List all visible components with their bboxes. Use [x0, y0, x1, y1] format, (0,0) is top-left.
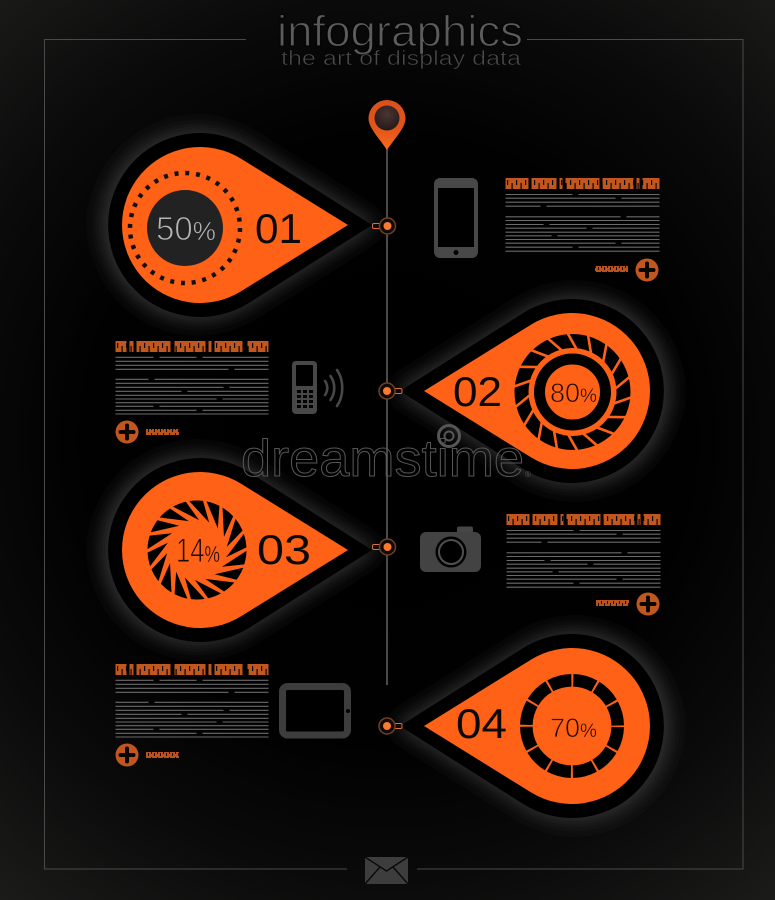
orange teardrop: [424, 313, 650, 469]
node 03: [372, 539, 396, 555]
greeked body lines: [506, 194, 660, 251]
icon: tablet: [282, 686, 350, 735]
more button 2: [116, 420, 179, 444]
icon: camera: [420, 526, 481, 572]
greeked body lines: [116, 680, 268, 737]
orange teardrop: [122, 472, 348, 628]
greeked body lines: [116, 357, 268, 414]
heading: infographics: infographics: [277, 7, 523, 56]
watermark: ®: [525, 470, 531, 479]
watermark: dreamstime: [241, 430, 524, 488]
drop 02: [394, 295, 670, 487]
subtitle: the art of display data: [281, 48, 522, 70]
more button 3: [596, 592, 660, 616]
swirl ring: [146, 499, 248, 601]
number: 02: [453, 368, 502, 415]
glow: [102, 129, 378, 321]
percent disc: [147, 190, 223, 266]
node 01: [372, 218, 396, 234]
more button 4: [116, 744, 179, 766]
drop 01: [102, 129, 378, 321]
number: 01: [255, 205, 302, 252]
orange teardrop: [424, 648, 650, 804]
orange teardrop: [122, 147, 348, 303]
dotted ring: [130, 173, 240, 283]
percent value: 14%: [176, 532, 220, 570]
greeked heading: [116, 341, 268, 352]
title: [277, 7, 523, 70]
text block 2: [116, 341, 268, 414]
segmented ring: [526, 680, 618, 772]
greeked heading: [116, 664, 268, 675]
icon: smartphone: [434, 178, 478, 258]
greeked heading: [506, 514, 660, 525]
percent value: 80%: [550, 378, 597, 408]
node 02: [379, 383, 402, 399]
more button 1: [595, 258, 658, 282]
number: 04: [456, 700, 507, 747]
black outline: [108, 133, 372, 317]
black outline: [400, 299, 664, 483]
percent value: 70%: [550, 713, 597, 743]
black outline: [108, 458, 372, 642]
node 04: [379, 718, 402, 734]
text block 3: [506, 514, 660, 587]
percent value: 50%: [156, 210, 216, 247]
icon: mobile phone with signal: [292, 361, 342, 414]
icon: envelope: [365, 857, 408, 884]
drop 03: [102, 454, 378, 646]
text block 4: [116, 664, 268, 737]
glow: [394, 295, 670, 487]
greeked heading: [506, 178, 660, 189]
text block 1: [506, 178, 660, 251]
number: 03: [257, 526, 311, 573]
map pin: [368, 100, 406, 150]
segmented ring: [514, 333, 631, 451]
timeline: [386, 148, 388, 685]
glow: [394, 630, 670, 822]
greeked body lines: [506, 530, 660, 587]
black outline: [400, 634, 664, 818]
drop 04: [394, 630, 670, 822]
glow: [102, 454, 378, 646]
